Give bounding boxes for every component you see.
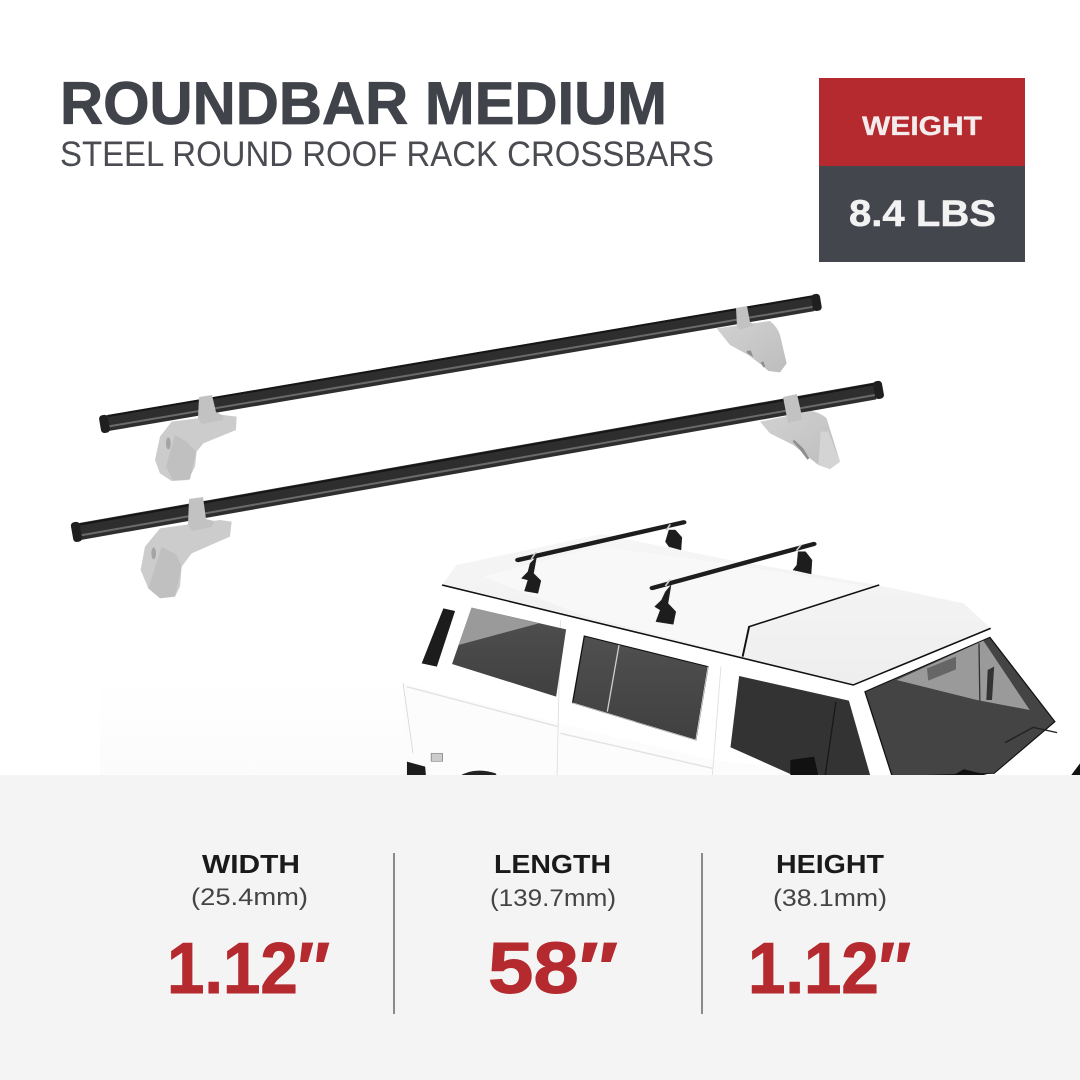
length spec: LENGTH xyxy=(494,849,611,879)
window 3 xyxy=(730,676,871,777)
height spec: HEIGHT xyxy=(776,849,884,879)
weight badge xyxy=(819,78,1025,262)
height spec: (38.1mm) xyxy=(773,885,887,912)
window 2 xyxy=(573,636,708,740)
side vent xyxy=(422,608,455,667)
roof rack bars xyxy=(518,522,814,624)
bracket feet right xyxy=(717,321,840,469)
title: ROUNDBAR MEDIUM xyxy=(60,70,667,137)
bracket feet left xyxy=(141,415,237,598)
window 1 xyxy=(452,608,566,697)
roof xyxy=(442,534,991,685)
height spec xyxy=(748,849,911,1009)
width spec xyxy=(167,849,330,1009)
width spec: (25.4mm) xyxy=(191,884,308,911)
van body xyxy=(403,534,1080,783)
weight badge: WEIGHT xyxy=(862,111,983,141)
crossbars product image xyxy=(70,293,884,598)
subtitle: STEEL ROUND ROOF RACK CROSSBARS xyxy=(60,135,714,174)
width spec: WIDTH xyxy=(202,849,300,879)
straps xyxy=(188,306,802,531)
bottom crossbar xyxy=(70,380,884,543)
weight badge: 8.4 LBS xyxy=(849,193,996,234)
windshield xyxy=(865,637,1055,777)
length spec xyxy=(488,849,618,1009)
bumper parts xyxy=(407,762,426,777)
length spec: 58″ xyxy=(488,929,618,1009)
height spec: 1.12″ xyxy=(748,929,911,1009)
length spec: (139.7mm) xyxy=(490,885,616,912)
bottom specs panel xyxy=(0,775,1080,1080)
top crossbar xyxy=(99,293,822,434)
width spec: 1.12″ xyxy=(167,929,330,1009)
van illustration xyxy=(403,522,1080,783)
